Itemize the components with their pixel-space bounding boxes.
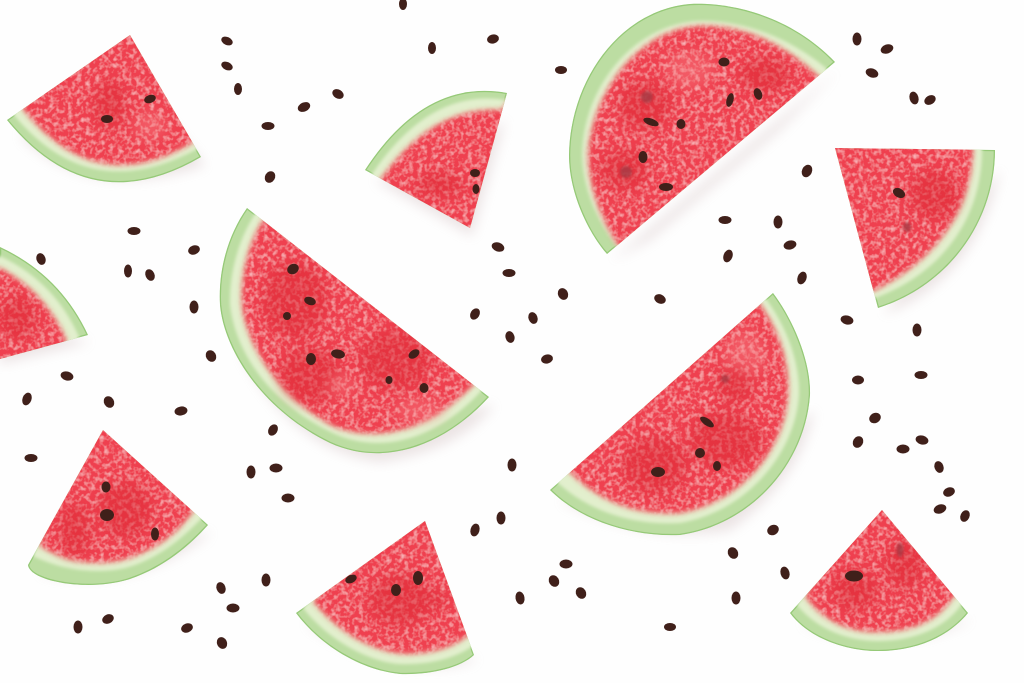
slice: right wedge [835, 148, 995, 308]
slice: bottom left wedge [28, 430, 208, 585]
slice: top right half round [569, 4, 840, 270]
slice: bottom centre wedge [296, 521, 474, 674]
slice: bottom right wedge [790, 510, 968, 651]
slice: centre big half round [220, 208, 489, 454]
slice: right big half round [550, 293, 810, 536]
slice: small top centre wedge [365, 90, 507, 228]
slice: top left wedge [7, 35, 201, 182]
slice: left edge partial wedge [0, 247, 88, 370]
